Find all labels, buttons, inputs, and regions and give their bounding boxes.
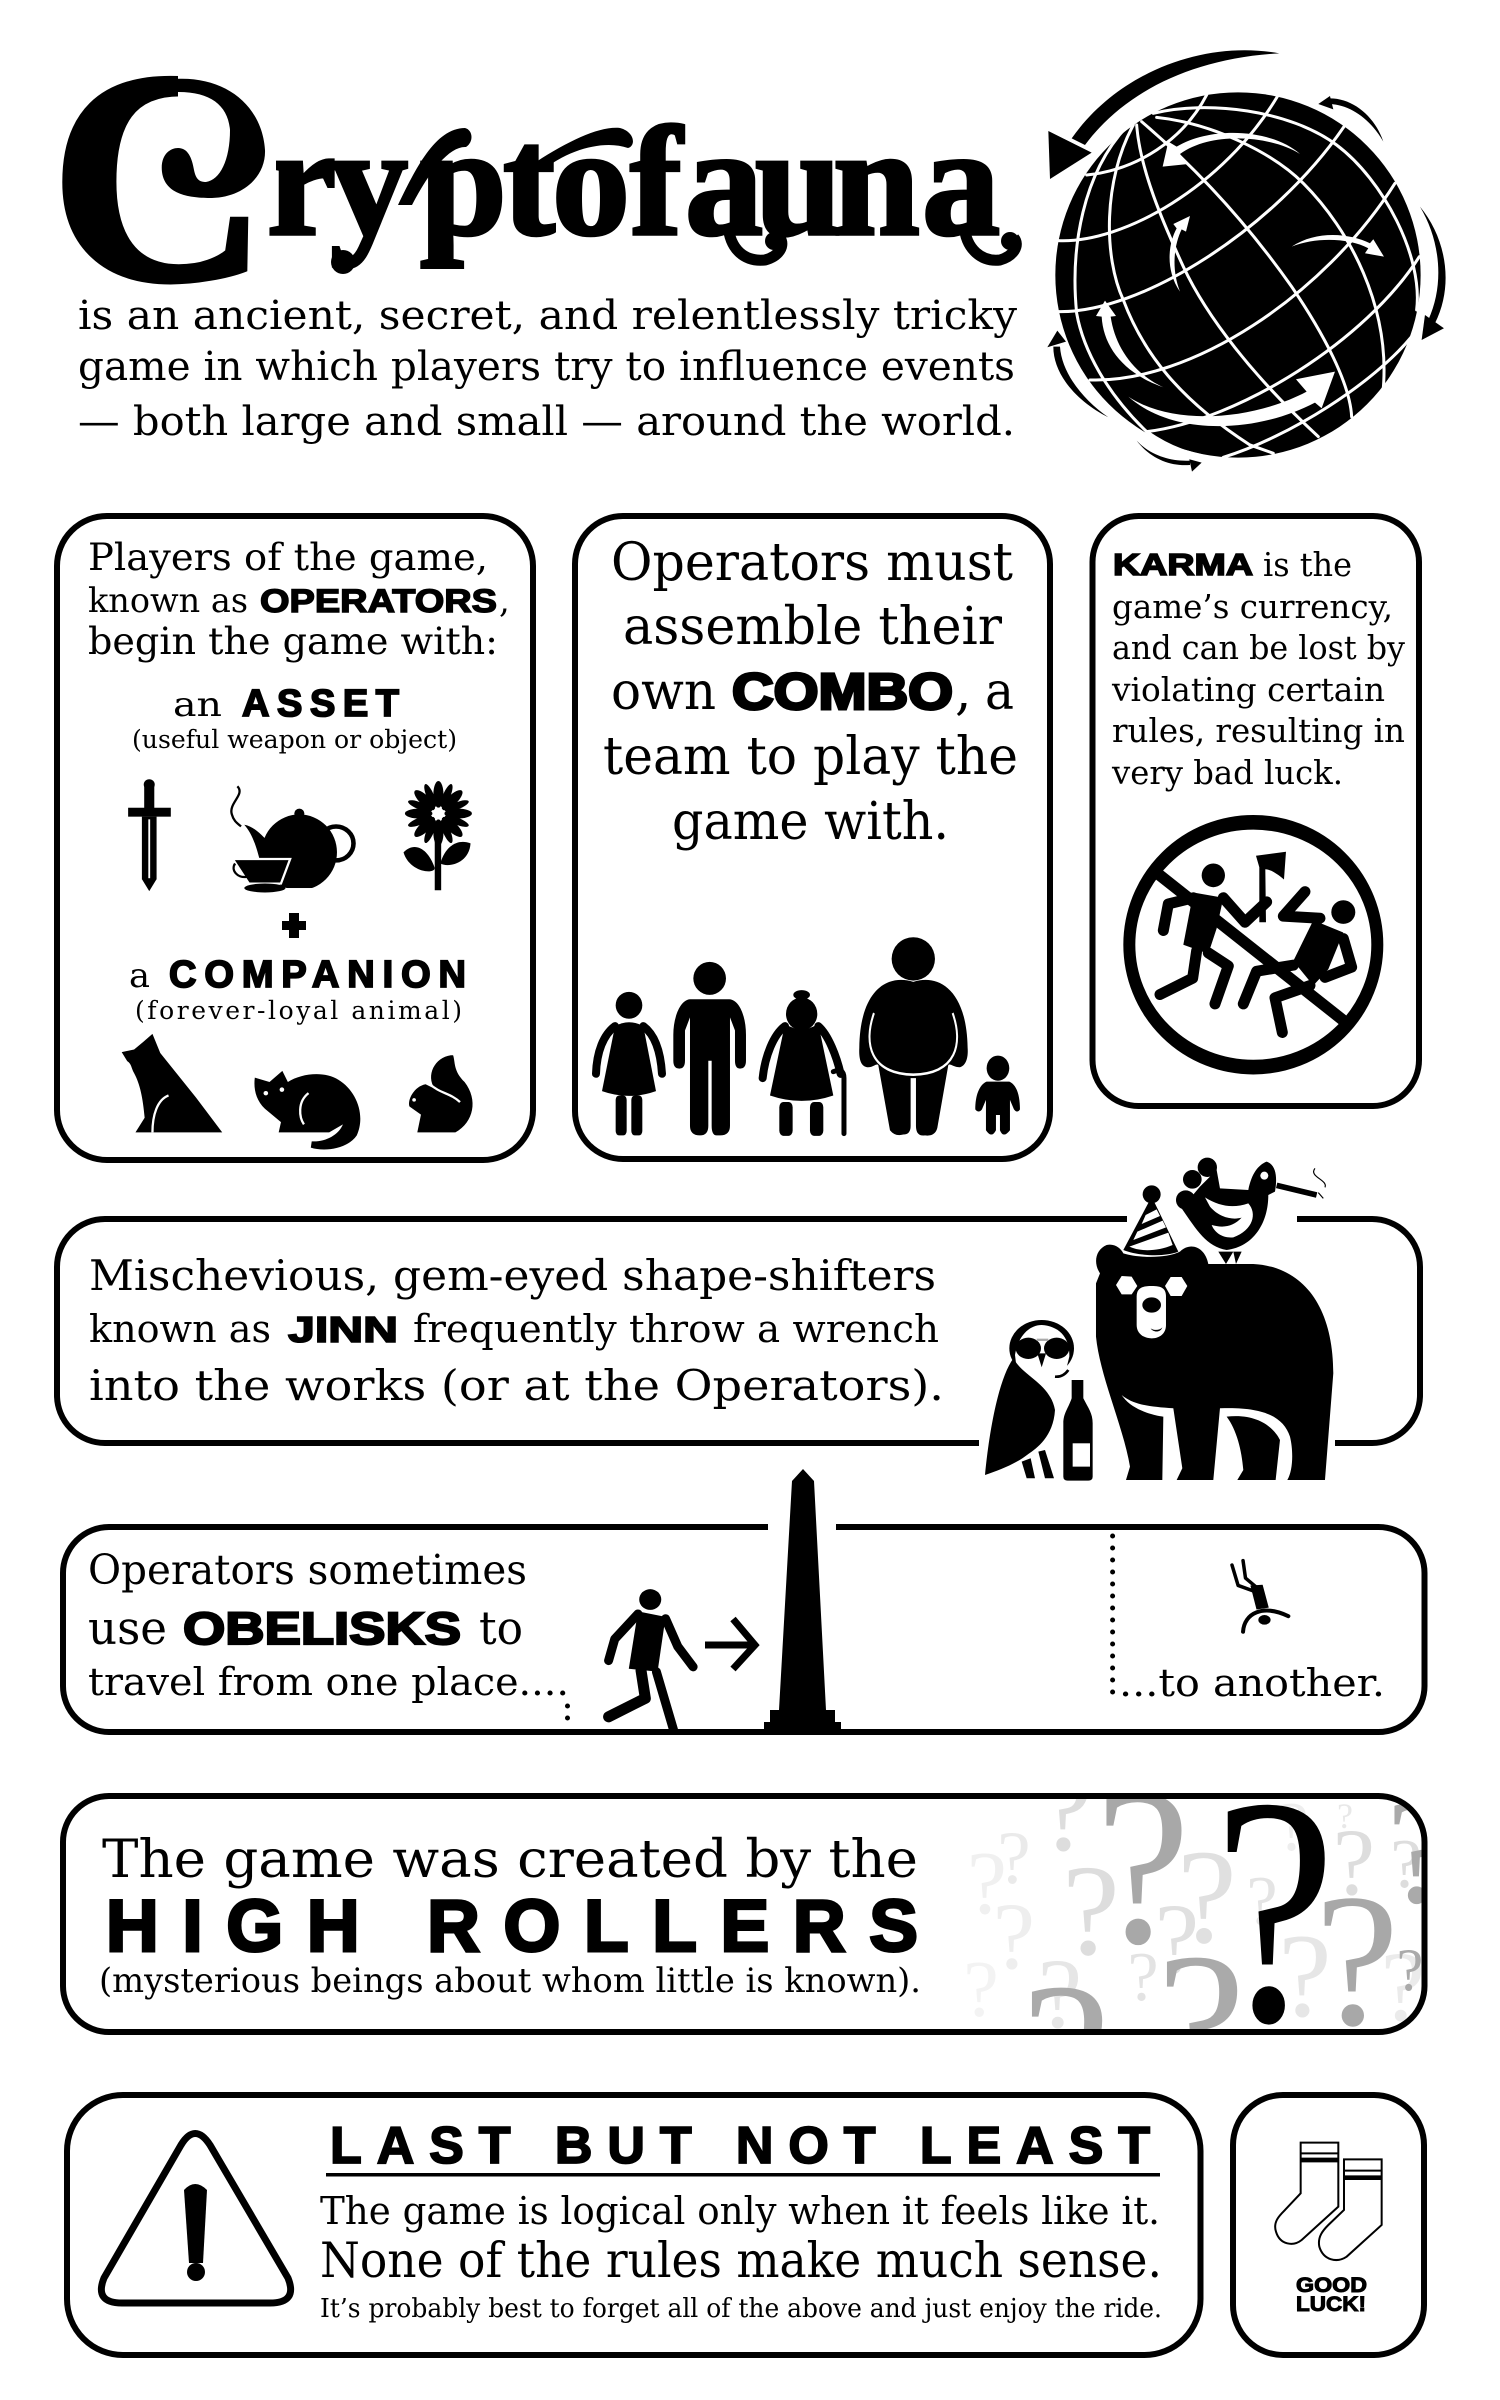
question marks pattern: ?: [1039, 1743, 1093, 1876]
icon: owl, bear and hen: [985, 1158, 1333, 1481]
question marks pattern: ?: [1095, 1742, 1190, 1991]
icon: cat: [254, 1071, 360, 1149]
question marks pattern: ?: [963, 1946, 999, 2034]
panel 1 heading: OPERATORS: [260, 583, 497, 619]
icon: socks: [1275, 2143, 1382, 2260]
panel 1 heading: begin the game with:: [88, 620, 498, 663]
intro text: — both large and small — around the world.: [78, 399, 1015, 445]
good luck label: LUCK!: [1296, 2293, 1366, 2316]
panel 3 text: and can be lost by: [1112, 628, 1405, 667]
obelisk text: [88, 1546, 569, 1704]
icon: warning triangle: [101, 2134, 291, 2303]
closing text: [320, 2189, 1162, 2324]
title: C: [50, 9, 269, 345]
panel 3 text: rules, resulting in: [1112, 711, 1405, 750]
high rollers text: (mysterious beings about whom little is known).: [99, 1961, 921, 2001]
caption: to another: ...to another.: [1119, 1661, 1385, 1705]
hen with cigarette: [1176, 1158, 1325, 1264]
large person figure: [859, 937, 968, 1136]
question marks pattern: ?: [1337, 1796, 1353, 1836]
question marks pattern: ?: [1127, 1939, 1159, 2016]
panel: combo: [575, 516, 1050, 1159]
child figure: [975, 1056, 1020, 1135]
obelisk text: Operators sometimes: [88, 1546, 527, 1594]
question marks pattern: ?: [1157, 1913, 1245, 2134]
jinn text: into the works (or at the Operators).: [89, 1361, 944, 1410]
title: [50, 9, 1019, 345]
panel: karma: [1092, 516, 1419, 1106]
panel 2 text: Operators must: [611, 533, 1013, 593]
jinn text: known as: [89, 1307, 271, 1351]
panel 1 heading: Players of the game,: [88, 536, 488, 579]
jinn text: [89, 1251, 944, 1410]
good luck label: GOOD: [1296, 2274, 1367, 2297]
icon: squirrel: [409, 1055, 473, 1132]
high rollers text: The game was created by the: [102, 1830, 918, 1890]
panel 2 text: assemble their: [623, 597, 1002, 657]
question marks pattern: ?: [1387, 1769, 1453, 1935]
high rollers text: HIGH ROLLERS: [106, 1886, 918, 1967]
closing text: The game is logical only when it feels like it.: [320, 2189, 1160, 2233]
panel 2 text: a: [985, 662, 1014, 722]
high rollers text: [99, 1830, 921, 2001]
intro text: game in which players try to influence events: [78, 344, 1015, 390]
question marks pattern: ?: [993, 1883, 1035, 1989]
question marks pattern: ?: [1277, 1789, 1309, 1866]
panel 1 heading: [88, 536, 510, 663]
question marks pattern: ?: [1390, 1826, 1422, 1903]
label: an asset: [132, 683, 457, 754]
question marks pattern: ?: [1038, 1938, 1082, 2049]
party hat: [1123, 1185, 1178, 1255]
question marks pattern: ?: [1213, 1731, 1336, 2091]
panel 2 text: COMBO: [732, 663, 953, 720]
intro text: is an ancient, secret, and relentlessly tricky: [78, 293, 1017, 339]
panel 2 text: own: [611, 662, 716, 722]
arrow: [705, 1619, 755, 1669]
label: a companion: COMPANION: [169, 954, 466, 996]
last but not least heading: LAST BUT NOT LEAST: [330, 2117, 1150, 2175]
panel 1 heading: ,: [499, 581, 510, 621]
label: an asset: (useful weapon or object): [132, 725, 457, 754]
obelisk text: travel from one place....: [88, 1660, 569, 1704]
obelisk text: to: [479, 1601, 523, 1655]
panel 2 text: [603, 533, 1018, 852]
question marks pattern: ?: [997, 1817, 1031, 1900]
jinn text: Mischevious, gem-eyed shape-shifters: [89, 1251, 936, 1300]
question marks pattern: ?: [1397, 1937, 1423, 2003]
icon: obelisk: [764, 1469, 841, 1733]
panel 2 text: team to play the: [603, 727, 1018, 787]
panel 3 text: game’s currency,: [1112, 587, 1393, 626]
question marks pattern: ?: [1381, 1931, 1425, 2042]
good luck label: [1296, 2274, 1367, 2316]
jinn text: frequently throw a wrench: [413, 1307, 939, 1351]
panel 2 text: ,: [955, 662, 972, 722]
jinn text: JINN: [288, 1309, 398, 1350]
panel: operators begin with: [57, 516, 533, 1160]
panel 3 text: [1111, 545, 1405, 792]
title: ryptofauna: [267, 95, 1000, 268]
closing text: None of the rules make much sense.: [320, 2232, 1162, 2289]
label: a companion: [129, 954, 466, 1025]
intro text: [78, 293, 1017, 445]
wine bottle: [1063, 1380, 1093, 1481]
bear: [1096, 1245, 1333, 1480]
closing text: It’s probably best to forget all of the above and just enjoy the ride.: [320, 2294, 1162, 2324]
panel 1 heading: known as: [88, 581, 248, 621]
question marks pattern: ?: [967, 1834, 1007, 1933]
question marks pattern: ?: [1062, 1839, 1120, 1983]
panel 3 text: very bad luck.: [1111, 753, 1343, 792]
question marks pattern: ?: [1022, 1943, 1110, 2164]
panel: last but not least: [67, 2095, 1200, 2355]
panel: high rollers: [60, 1793, 1428, 2035]
panel: obelisks: [63, 1469, 1424, 1733]
question marks pattern: ?: [1333, 1809, 1375, 1915]
icon: walking person: [609, 1589, 693, 1730]
panel 3 text: KARMA: [1113, 547, 1253, 582]
panel 3 text: violating certain: [1111, 670, 1385, 709]
label: an asset: ASSET: [242, 683, 399, 725]
icon: globe with swirling arrows: [1047, 50, 1446, 472]
question marks pattern: ?: [1278, 1909, 1332, 2042]
icon: flower: [404, 781, 472, 890]
panel: good luck: [1233, 2095, 1424, 2355]
obelisk text: OBELISKS: [183, 1603, 461, 1654]
label: an asset: an: [173, 685, 222, 725]
dotted line right: [1110, 1536, 1115, 1696]
question marks pattern: ?: [1315, 1856, 1399, 2066]
owl with sunglasses: [985, 1320, 1074, 1478]
icon: no fighting sign: [1129, 822, 1377, 1067]
icon: sword: [128, 779, 171, 891]
panel 3 text: is the: [1263, 545, 1352, 584]
panel: jinn: [57, 1158, 1420, 1481]
question marks pattern: ?: [1177, 1823, 1237, 1972]
plus sign: [282, 913, 306, 938]
dotted line left: [565, 1706, 570, 1730]
woman figure: [596, 992, 662, 1135]
question marks pattern: [968, 1799, 1422, 2029]
question marks pattern: ?: [1246, 1863, 1278, 1940]
question marks pattern: ?: [1155, 1883, 1199, 1994]
grandmother figure: [763, 990, 844, 1136]
label: a companion: a: [129, 956, 150, 996]
obelisk text: use: [88, 1601, 167, 1655]
icon: team of five people: [596, 937, 1020, 1136]
icon: dog: [122, 1034, 222, 1132]
panel 2 text: game with.: [672, 792, 949, 852]
icon: teapot and cup: [231, 786, 353, 897]
label: a companion: (forever-loyal animal): [135, 996, 462, 1025]
man figure: [673, 962, 746, 1135]
icon: falling person: [1232, 1561, 1288, 1632]
